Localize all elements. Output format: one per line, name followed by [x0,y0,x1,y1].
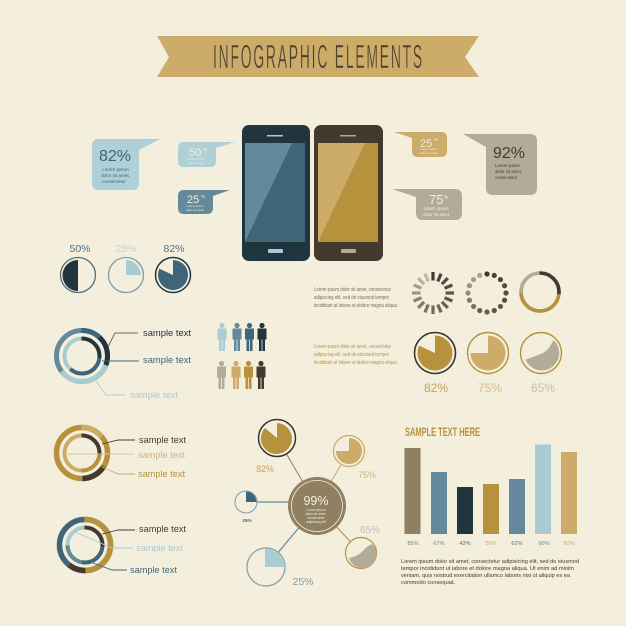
text block: gold: incididunt ut labore et dolore magna aliqua. [314,360,398,366]
callout: 25% tan [394,132,447,157]
callout: 92%: dolor sit amet, [495,169,522,174]
pie: 25%: 25% [115,243,137,255]
pie: grey 65%: 65% [531,381,555,395]
chart heading: SAMPLE TEXT HERE [405,425,480,439]
node 65%: 65% [360,525,380,536]
callout: 50%: dolor sit amet [187,161,205,165]
callout: 82%: Lorem ipsum [102,167,129,172]
callout: 92%: 92% [493,145,525,162]
donut chart: mixed: sample text [136,543,184,553]
callout: 25% tan: 25 [420,138,432,150]
callout: 25% blue: dolor sit amet [186,208,204,212]
bar chart [404,425,577,547]
title: INFOGRAPHIC ELEMENTS [213,39,422,76]
callout: 50%: % [203,147,207,152]
callout: 25% blue: 25 [187,194,199,206]
paragraph: commodo consequat. [401,580,455,586]
text block: gold: Lorem ipsum dolor sit amet, consectetur [314,344,391,350]
callout: 82%: dolor sit amet, [101,173,130,178]
bar chart: 85% [407,541,419,547]
pie: 82% [156,243,190,292]
donut chart: blue: sample text [143,328,192,338]
bar chart: 62% [511,541,523,547]
callout: 25% tan: Lorem ipsum [420,147,438,151]
donut chart: mixed: sample text [139,524,187,534]
bar chart: 90% [538,541,550,547]
spinner: bars [412,272,454,314]
pie: grey 65% [520,332,562,395]
node 82%: 82% [256,464,274,474]
donut chart: blue [56,328,192,400]
donut chart: blue: sample text [130,390,179,400]
node large 25% [247,548,314,588]
donut chart: gold: sample text [138,450,186,460]
pie: 50%: 50% [69,243,91,255]
callout: 25% blue: % [201,194,205,199]
node large 25%: 25% [292,576,314,588]
donut chart: gold [56,428,187,479]
callout: 50%: Lorem ipsum [187,157,205,161]
node 75%: 75% [358,470,376,480]
bar chart: 42% [459,541,471,547]
paragraph: tempor incididunt ut labore et dolore magna aliqua. Ut enim ad minim [401,566,575,572]
callout: 82%: consectetur [102,179,126,184]
hub: consectetur [307,516,325,520]
node 82% [256,420,296,474]
people: gold row [217,361,266,389]
hub [288,477,346,535]
title banner [157,36,479,77]
node small 25% [235,491,257,524]
text block: gold [314,344,398,366]
phone: gold [314,125,383,261]
people: blue row [218,323,266,351]
callout: 75%: 75 [429,192,443,207]
pie: 50% [60,243,96,292]
hub: adipiscing elit [306,520,326,524]
callout: 25% blue: Lorem ipsum [186,204,204,208]
text block: gold: adipiscing elit, sed do eiusmod tempor [314,352,389,358]
hub: Lorem ipsum [306,508,326,512]
callout: 75% [392,189,462,220]
spinner: dots [465,271,509,315]
callout: 75%: Lorem ipsum [424,206,449,211]
text block: dark: adipiscing elit, sed do eiusmod tempor [314,295,389,301]
callout: 92%: consectetur [495,175,518,180]
paragraph [401,559,579,586]
callout: 75%: % [444,195,449,201]
callout: 50% [178,142,235,167]
paragraph: veniam, quis nostrud exercitation ullamco laboris nisi ut aliquip ex ea [401,573,570,579]
hub: dolor sit amet, [306,512,326,516]
phone: blue [242,125,310,261]
pie: gold 82% [414,332,456,395]
network diagram [235,420,380,588]
text block: dark [314,287,398,309]
pie: tan 75%: 75% [478,381,502,395]
node small 25%: 25% [242,518,253,524]
hub: 99% [303,494,329,508]
callout: 82% [92,139,160,190]
bar chart: 50% [485,541,497,547]
donut chart: mixed: sample text [130,565,178,575]
pie: 82%: 82% [163,243,185,255]
bar chart: 67% [433,541,445,547]
donut chart: gold: sample text [139,435,187,445]
donut chart: blue: sample text [143,355,192,365]
pie: 25% [108,243,144,292]
pie: gold 82%: 82% [424,381,448,395]
callout: 92% [463,134,537,195]
paragraph: Lorem ipsum dolor sit amet, consectetur adipisicing elit, sed do eiusmod [401,559,579,565]
bar chart: 80% [563,541,575,547]
callout: 50%: 50 [189,147,201,159]
callout: 92%: Lorem ipsum [495,163,520,168]
callout: 75%: dolor sit amet [423,212,450,217]
callout: 25% tan: dolor sit amet [420,151,438,155]
node 75% [334,436,376,480]
progress ring [521,273,559,311]
donut chart: gold: sample text [138,469,186,479]
pie: tan 75% [468,332,508,395]
donut chart: mixed [60,520,187,575]
callout: 82%: 82% [99,148,131,165]
node 65% [346,525,380,568]
callout: 25% blue [178,190,230,214]
text block: dark: incididunt ut labore et dolore magna aliqua. [314,303,398,309]
callout: 25% tan: % [434,137,438,142]
text block: dark: Lorem ipsum dolor sit amet, consectetur [314,287,391,293]
